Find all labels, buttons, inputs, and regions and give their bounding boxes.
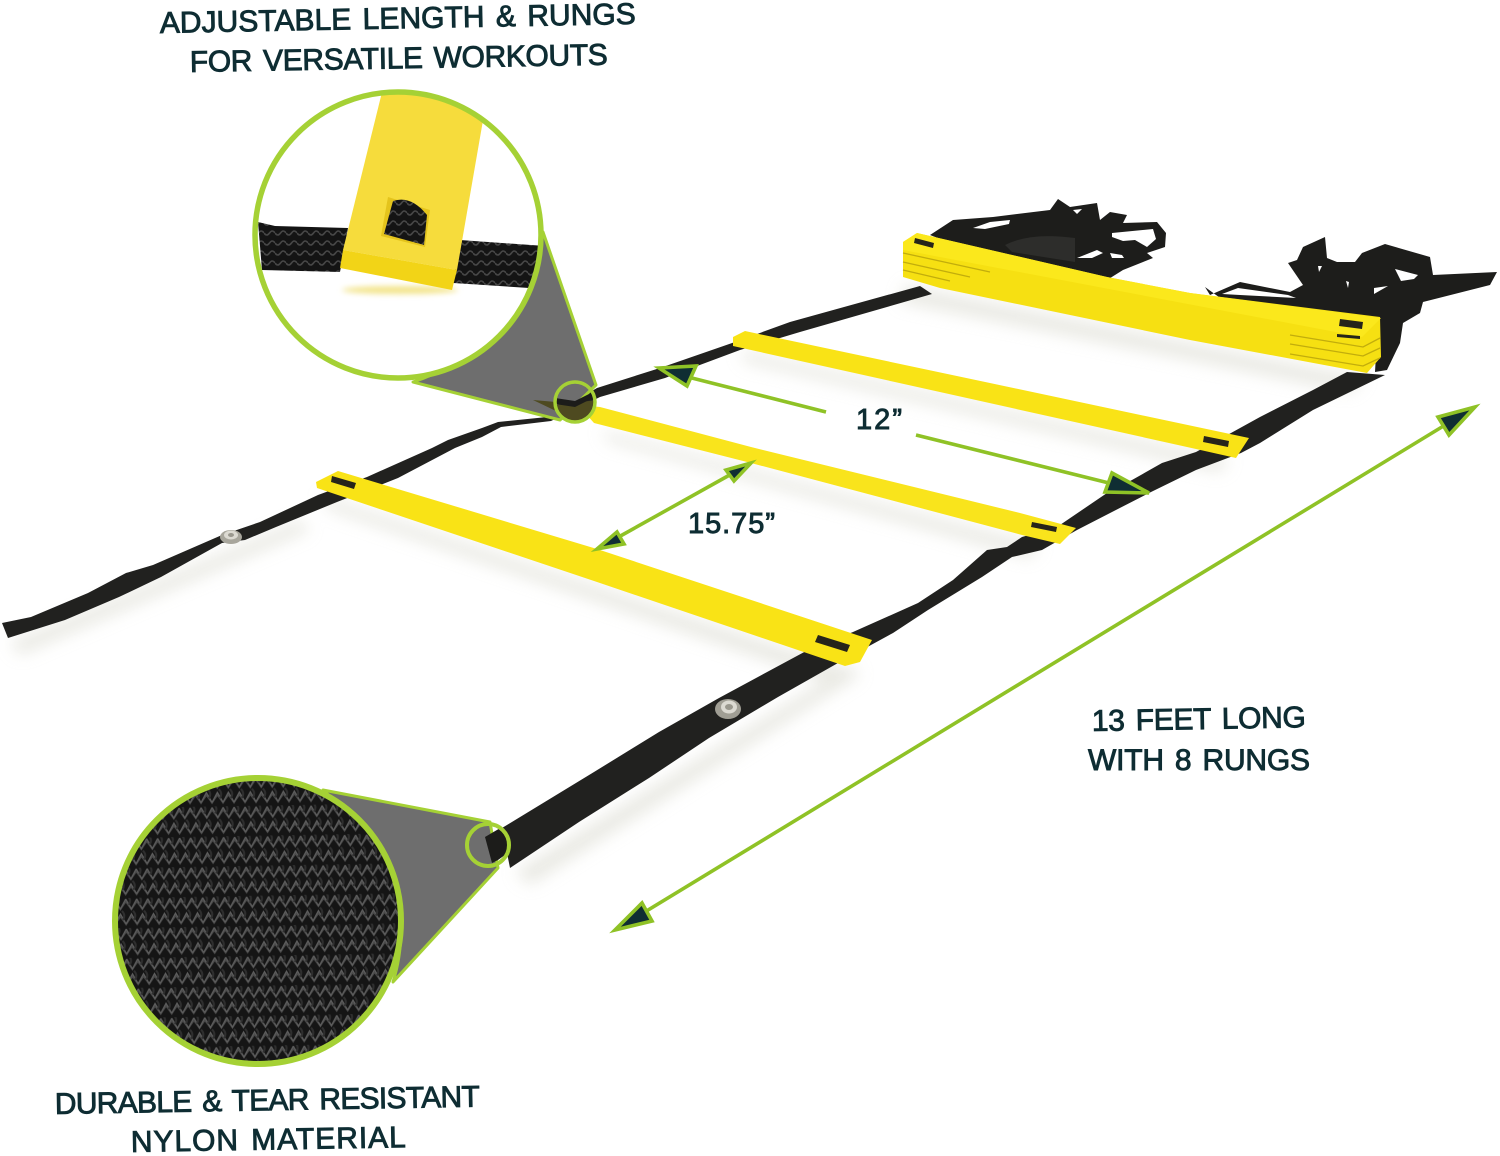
rung 1	[316, 471, 872, 666]
cone	[323, 790, 498, 982]
right strap	[502, 372, 1385, 868]
heading: durable nylon: DURABLE & TEAR RESISTANT	[55, 1081, 480, 1121]
cone	[413, 232, 596, 420]
rung 2	[578, 405, 1076, 544]
rivet: left strap	[220, 530, 242, 544]
tangled straps: right bundle	[1205, 237, 1497, 372]
fabric texture circle	[115, 778, 401, 1064]
arrow: 13 feet length	[615, 407, 1475, 930]
arrow: 15.75 inch width	[597, 463, 751, 549]
label: 15.75 inches: 15.75”	[688, 508, 775, 540]
heading: durable nylon	[55, 1081, 480, 1156]
label: 12 inches: 12”	[856, 404, 902, 436]
left strap	[2, 286, 932, 638]
tangled straps: left bundle	[930, 199, 1166, 280]
callout: fabric magnifier	[115, 778, 512, 1064]
arrow: 12 inch spacing	[659, 366, 1149, 493]
heading: 13 feet long	[1088, 701, 1310, 777]
rivet: right strap	[715, 699, 741, 719]
heading: adjustable length	[160, 0, 636, 79]
zoomed strap detail	[258, 94, 538, 369]
callout: rung magnifier	[255, 80, 597, 425]
ladder illustration	[2, 199, 1497, 868]
soft ground shadows	[10, 285, 1365, 885]
heading: adjustable length: FOR VERSATILE WORKOUTS	[190, 39, 608, 79]
ring	[255, 92, 541, 378]
strap end in spot	[485, 827, 512, 863]
stacked rungs	[903, 233, 1381, 373]
heading: 13 feet long: 13 FEET LONG	[1092, 701, 1306, 738]
rung 3	[733, 331, 1249, 458]
heading: 13 feet long: WITH 8 RUNGS	[1088, 744, 1310, 777]
source spot	[533, 382, 597, 425]
source spot	[467, 824, 509, 866]
